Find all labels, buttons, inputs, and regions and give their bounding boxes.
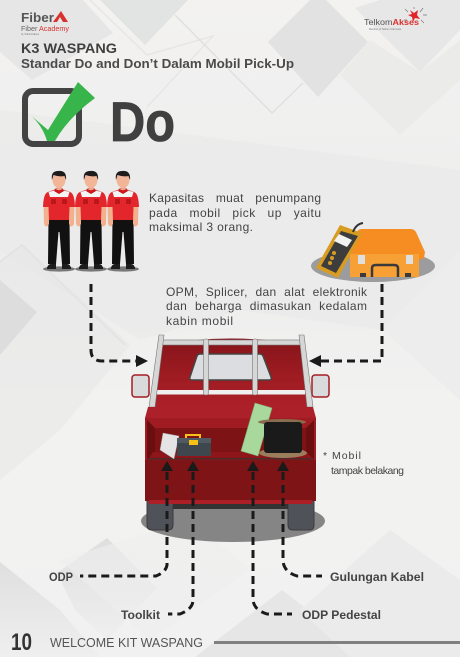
page number: 10 xyxy=(11,629,32,656)
label: Toolkit: Toolkit xyxy=(121,610,160,622)
logo: TelkomAkses: Member of Telkom Indonesia xyxy=(369,28,402,31)
ODP box xyxy=(160,433,179,459)
cab xyxy=(153,338,312,407)
toolkit xyxy=(177,435,211,456)
wheels xyxy=(147,473,314,530)
roof rack xyxy=(149,335,313,407)
note: rear view: * Mobil xyxy=(323,450,361,462)
text: OPM and splicer: OPM, Splicer, dan alat elektronik xyxy=(166,285,368,299)
text: OPM and splicer: kabin mobil xyxy=(166,314,233,328)
text: passenger capacity xyxy=(149,191,321,234)
footer text: WELCOME KIT WASPANG xyxy=(50,636,203,650)
arrow: ODP pedestal label xyxy=(247,461,292,614)
icon: green check box xyxy=(25,82,95,144)
arrow: cable reel label xyxy=(277,461,322,576)
text: OPM and splicer xyxy=(166,285,368,328)
arrow: workers to cab xyxy=(91,284,148,367)
text: OPM and splicer: dan beharga dimasukan kedalam xyxy=(166,299,367,313)
label: ODP: ODP xyxy=(49,572,73,584)
ODP pedestal xyxy=(241,403,272,456)
cable reel xyxy=(258,419,307,458)
arrow: toolkit label xyxy=(168,461,199,614)
logo: Fiber Academy: Fiber Academy xyxy=(21,26,70,33)
heading: Do: Do xyxy=(110,90,175,153)
arrow: ODP label xyxy=(80,461,173,576)
illustration: pick-up truck rear view xyxy=(132,335,329,542)
logo: Fiber Academy xyxy=(21,11,70,36)
text: passenger capacity: maksimal 3 orang. xyxy=(149,220,253,234)
text: passenger capacity: Kapasitas muat penumpang xyxy=(149,191,321,205)
logo: Fiber Academy: by TelkomAkses xyxy=(21,33,40,36)
illustration: three workers xyxy=(43,171,139,272)
subtitle: Standar Do and Don’t Dalam Mobil Pick-Up xyxy=(21,57,294,71)
truck bed xyxy=(145,407,316,430)
logo: Fiber Academy: Fiber xyxy=(21,11,54,25)
note: rear view: tampak belakang xyxy=(331,465,404,477)
note: rear view xyxy=(323,450,404,477)
label: ODP Pedestal: ODP Pedestal xyxy=(302,610,381,622)
footer xyxy=(11,629,460,656)
mirrors xyxy=(132,375,329,397)
truck shadow xyxy=(141,500,325,542)
logo: TelkomAkses xyxy=(364,7,427,31)
arrow: case to cab xyxy=(309,284,382,367)
label: Gulungan Kabel: Gulungan Kabel xyxy=(330,572,424,584)
text: passenger capacity: pada mobil pick up yaitu xyxy=(149,206,321,220)
illustration: OPM and splicer case xyxy=(311,223,435,282)
rear window xyxy=(190,354,271,380)
title: K3 WASPANG xyxy=(21,41,117,56)
logo: TelkomAkses: TelkomAkses xyxy=(364,17,419,27)
tailgate xyxy=(145,460,316,501)
